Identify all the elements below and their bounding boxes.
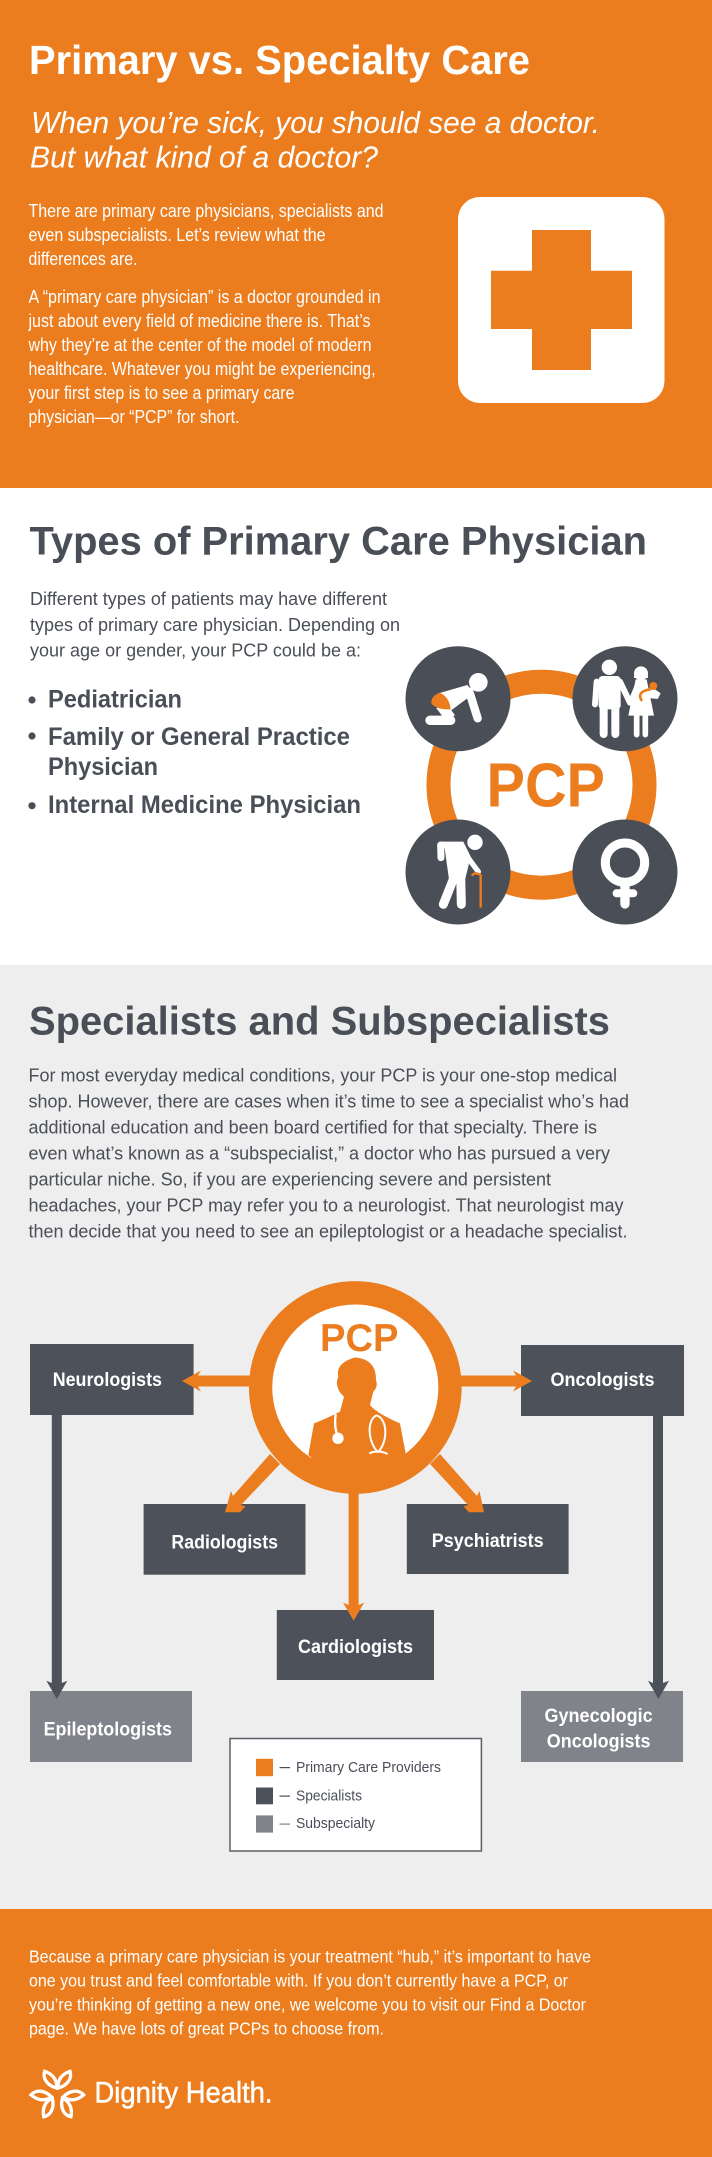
legend bbox=[230, 1738, 481, 1851]
intro paragraph bbox=[28, 201, 384, 269]
intro paragraph: differences are. bbox=[28, 249, 138, 269]
arrow: PCP to Neurologists bbox=[182, 1370, 252, 1392]
intro paragraph: There are primary care physicians, specialists and bbox=[28, 201, 384, 221]
closing text bbox=[29, 1947, 591, 2039]
arrow: PCP to Radiologists bbox=[225, 1454, 280, 1512]
subtitle: But what kind of a doctor? bbox=[30, 140, 379, 174]
text block: For most everyday medical conditions, your PCP is your one-stop medical bbox=[28, 1066, 617, 1086]
icon: elderly person with cane bbox=[406, 820, 510, 924]
subtitle: When you’re sick, you should see a doctor. bbox=[31, 105, 600, 140]
box: Gynecologic Oncologists bbox=[521, 1691, 683, 1762]
text block: additional education and been board certified for that specialty. There is bbox=[28, 1118, 597, 1138]
panel: header bbox=[0, 0, 712, 488]
closing text: one you trust and feel comfortable with. If you don’t currently have a PCP, or bbox=[29, 1971, 568, 1991]
text block bbox=[30, 589, 400, 661]
box: Radiologists bbox=[144, 1504, 306, 1575]
arrow: PCP to Psychiatrists bbox=[430, 1454, 484, 1512]
icon: Dignity Health flower bbox=[31, 2071, 84, 2117]
PCP definition paragraph bbox=[28, 287, 380, 427]
box: Neurologists: Neurologists bbox=[53, 1370, 162, 1391]
closing text: Because a primary care physician is your treatment “hub,” it’s important to have bbox=[29, 1947, 591, 1967]
arrow: Neurologists to Epileptologists bbox=[46, 1415, 67, 1699]
text block bbox=[28, 1066, 629, 1242]
text block: even what’s known as a “subspecialist,” a doctor who has pursued a very bbox=[28, 1144, 610, 1164]
box: Radiologists: Radiologists bbox=[171, 1533, 278, 1554]
icon: medical cross bbox=[458, 197, 664, 403]
icon: female symbol bbox=[572, 820, 678, 924]
text block: shop. However, there are cases when it’s time to see a specialist who’s had bbox=[28, 1092, 629, 1112]
PCP ring diagram: PCP bbox=[486, 752, 605, 821]
heading: Types of Primary Care Physician bbox=[30, 519, 647, 563]
bullet list bbox=[28, 685, 361, 819]
arrow: Oncologists to Gynecologic Oncologists bbox=[648, 1416, 669, 1699]
box: Cardiologists: Cardiologists bbox=[298, 1637, 413, 1658]
PCP doctor circle bbox=[261, 1293, 450, 1482]
logo: Dignity Health: Dignity Health. bbox=[94, 2077, 272, 2110]
panel: specialists and subspecialists bbox=[0, 965, 712, 1909]
arrow: PCP to Cardiologists bbox=[343, 1490, 364, 1621]
PCP definition paragraph: just about every field of medicine there is. That’s bbox=[28, 311, 370, 331]
bullet list: Family or General Practice bbox=[48, 723, 350, 751]
text block: types of primary care physician. Depending on bbox=[30, 615, 400, 635]
icon: family bbox=[572, 646, 678, 751]
legend: Specialists bbox=[296, 1788, 362, 1804]
legend: Primary Care Providers bbox=[296, 1760, 441, 1776]
subtitle bbox=[30, 105, 600, 174]
box: Epileptologists: Epileptologists bbox=[44, 1719, 172, 1740]
box: Epileptologists bbox=[30, 1691, 192, 1762]
panel: footer bbox=[0, 1909, 712, 2157]
panel: types of primary care physician bbox=[0, 488, 712, 965]
text block: your age or gender, your PCP could be a: bbox=[30, 641, 361, 661]
bullet list: Physician bbox=[48, 753, 158, 781]
text block: headaches, your PCP may refer you to a neurologist. That neurologist may bbox=[28, 1196, 624, 1216]
text block: Different types of patients may have different bbox=[30, 589, 387, 609]
icon: crawling baby bbox=[406, 646, 510, 751]
bullet list: Internal Medicine Physician bbox=[48, 791, 361, 819]
PCP doctor circle: PCP bbox=[320, 1317, 398, 1360]
PCP definition paragraph: physician—or “PCP” for short. bbox=[28, 407, 240, 427]
box: Neurologists bbox=[30, 1344, 194, 1415]
PCP definition paragraph: your first step is to see a primary care bbox=[28, 383, 294, 403]
box: Oncologists bbox=[521, 1345, 684, 1416]
box: Cardiologists bbox=[277, 1610, 434, 1680]
title: Primary vs. Specialty Care bbox=[29, 37, 530, 83]
text block: then decide that you need to see an epileptologist or a headache specialist. bbox=[28, 1222, 628, 1242]
intro paragraph: even subspecialists. Let’s review what the bbox=[28, 225, 326, 245]
box: Gynecologic Oncologists: Oncologists bbox=[547, 1732, 650, 1753]
box: Psychiatrists: Psychiatrists bbox=[432, 1531, 544, 1552]
flow chart bbox=[30, 1293, 684, 1851]
text block: particular niche. So, if you are experiencing severe and persistent bbox=[28, 1170, 551, 1190]
arrow: PCP to Oncologists bbox=[459, 1370, 532, 1392]
bullet list: Pediatrician bbox=[48, 685, 182, 713]
PCP ring diagram bbox=[406, 646, 678, 924]
icon: doctor silhouette bbox=[308, 1357, 406, 1477]
heading: Specialists and Subspecialists bbox=[29, 999, 610, 1043]
box: Psychiatrists bbox=[407, 1504, 569, 1574]
box: Oncologists: Oncologists bbox=[550, 1370, 654, 1391]
logo: Dignity Health bbox=[31, 2071, 272, 2117]
closing text: page. We have lots of great PCPs to choose from. bbox=[29, 2019, 384, 2039]
closing text: you’re thinking of getting a new one, we welcome you to visit our Find a Doctor bbox=[29, 1995, 586, 2015]
legend: Subspecialty bbox=[296, 1816, 376, 1832]
PCP definition paragraph: A “primary care physician” is a doctor grounded in bbox=[28, 287, 380, 307]
box: Gynecologic Oncologists: Gynecologic bbox=[544, 1706, 653, 1727]
PCP definition paragraph: why they’re at the center of the model of modern bbox=[28, 335, 371, 355]
PCP definition paragraph: healthcare. Whatever you might be experiencing, bbox=[28, 359, 376, 379]
